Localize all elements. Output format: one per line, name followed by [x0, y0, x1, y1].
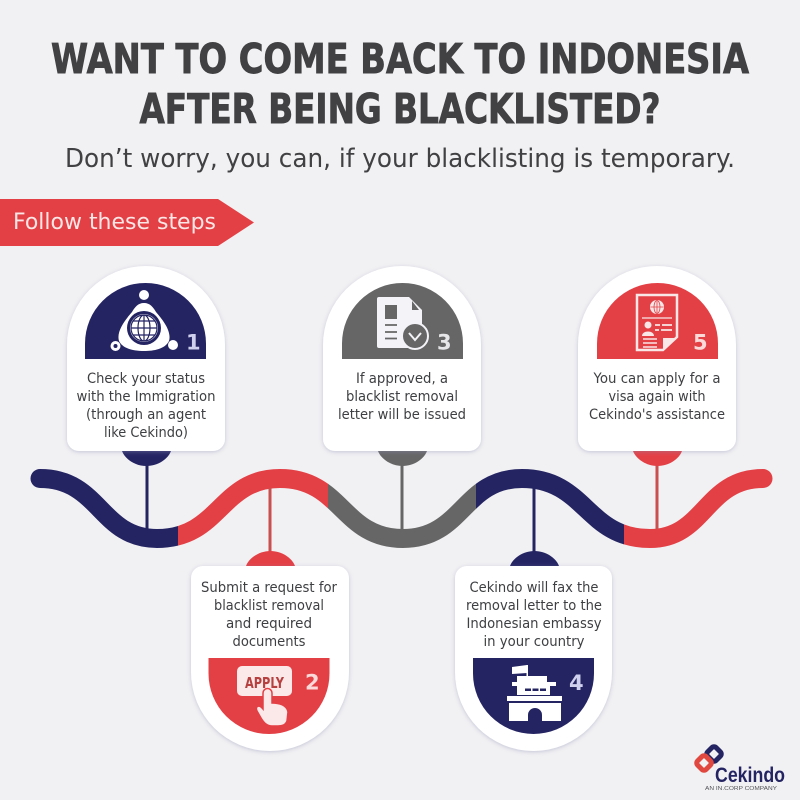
step 3 text: letter will be issued	[338, 407, 466, 423]
number 3: 3	[437, 330, 452, 354]
panel: step 1	[67, 266, 225, 451]
step 4 text: Cekindo will fax the	[470, 580, 599, 596]
step 5 text: Cekindo's assistance	[589, 407, 725, 423]
step 5 text: You can apply for a	[593, 371, 720, 387]
step 4 text: removal letter to the	[466, 598, 602, 614]
step 4 dome	[473, 658, 594, 734]
step 1 text	[76, 371, 216, 441]
number 5: 5	[693, 330, 708, 354]
step 5 dome	[597, 283, 718, 359]
logo tagline: AN IN.CORP COMPANY	[705, 786, 777, 792]
panel: step 4	[455, 566, 612, 751]
title: AFTER BEING BLACKLISTED?	[140, 85, 660, 133]
icon: apply button with hand	[237, 666, 292, 726]
step 1 text: (through an agent	[86, 407, 206, 423]
number 2: 2	[305, 670, 320, 694]
step 4 text: in your country	[484, 634, 585, 650]
step 1 text: with the Immigration	[76, 389, 216, 405]
step 1 text: like Cekindo)	[104, 425, 188, 441]
subtitle: Don’t worry, you can, if your blacklisting is temporary.	[65, 144, 735, 174]
timeline wave	[40, 478, 763, 538]
step 5 text: visa again with	[608, 389, 706, 405]
step 2 text: and required	[226, 616, 312, 632]
step 4 text	[466, 580, 602, 650]
step 2 text: documents	[232, 634, 306, 650]
step 3 text: If approved, a	[356, 371, 448, 387]
number 1: 1	[186, 330, 201, 354]
step 2 text: Submit a request for	[201, 580, 337, 596]
pin: step 2	[246, 488, 295, 566]
pin: step 4	[510, 488, 559, 566]
step 4 text: Indonesian embassy	[466, 616, 602, 632]
pin: step 3	[378, 451, 427, 529]
panel: step 2	[191, 566, 349, 751]
number 4: 4	[569, 671, 584, 695]
banner: follow these steps	[0, 199, 254, 246]
panel: step 3	[323, 266, 481, 451]
logo: Cekindo	[696, 746, 785, 792]
title	[51, 35, 749, 133]
pin: step 5	[633, 451, 682, 529]
step 2 text	[201, 580, 337, 650]
step 1 text: Check your status	[87, 371, 205, 387]
icon: apply button with hand: APPLY	[245, 674, 285, 692]
step 2 dome	[208, 658, 330, 734]
step 1 dome	[85, 283, 206, 359]
step 2 text: blacklist removal	[214, 598, 324, 614]
banner: follow these steps: Follow these steps	[13, 210, 216, 235]
pin: step 1	[122, 451, 171, 529]
icon: people around globe	[110, 290, 178, 351]
icon: embassy building	[507, 665, 562, 721]
logo wordmark: Cekindo	[715, 764, 785, 787]
step 3 text	[338, 371, 466, 423]
logo mark	[696, 746, 722, 771]
icon: approved document	[377, 297, 428, 349]
panel: step 5	[578, 266, 736, 451]
step 3 dome	[342, 283, 463, 359]
step 5 text	[589, 371, 725, 423]
step 3 text: blacklist removal	[346, 389, 458, 405]
icon: visa document	[637, 295, 677, 350]
